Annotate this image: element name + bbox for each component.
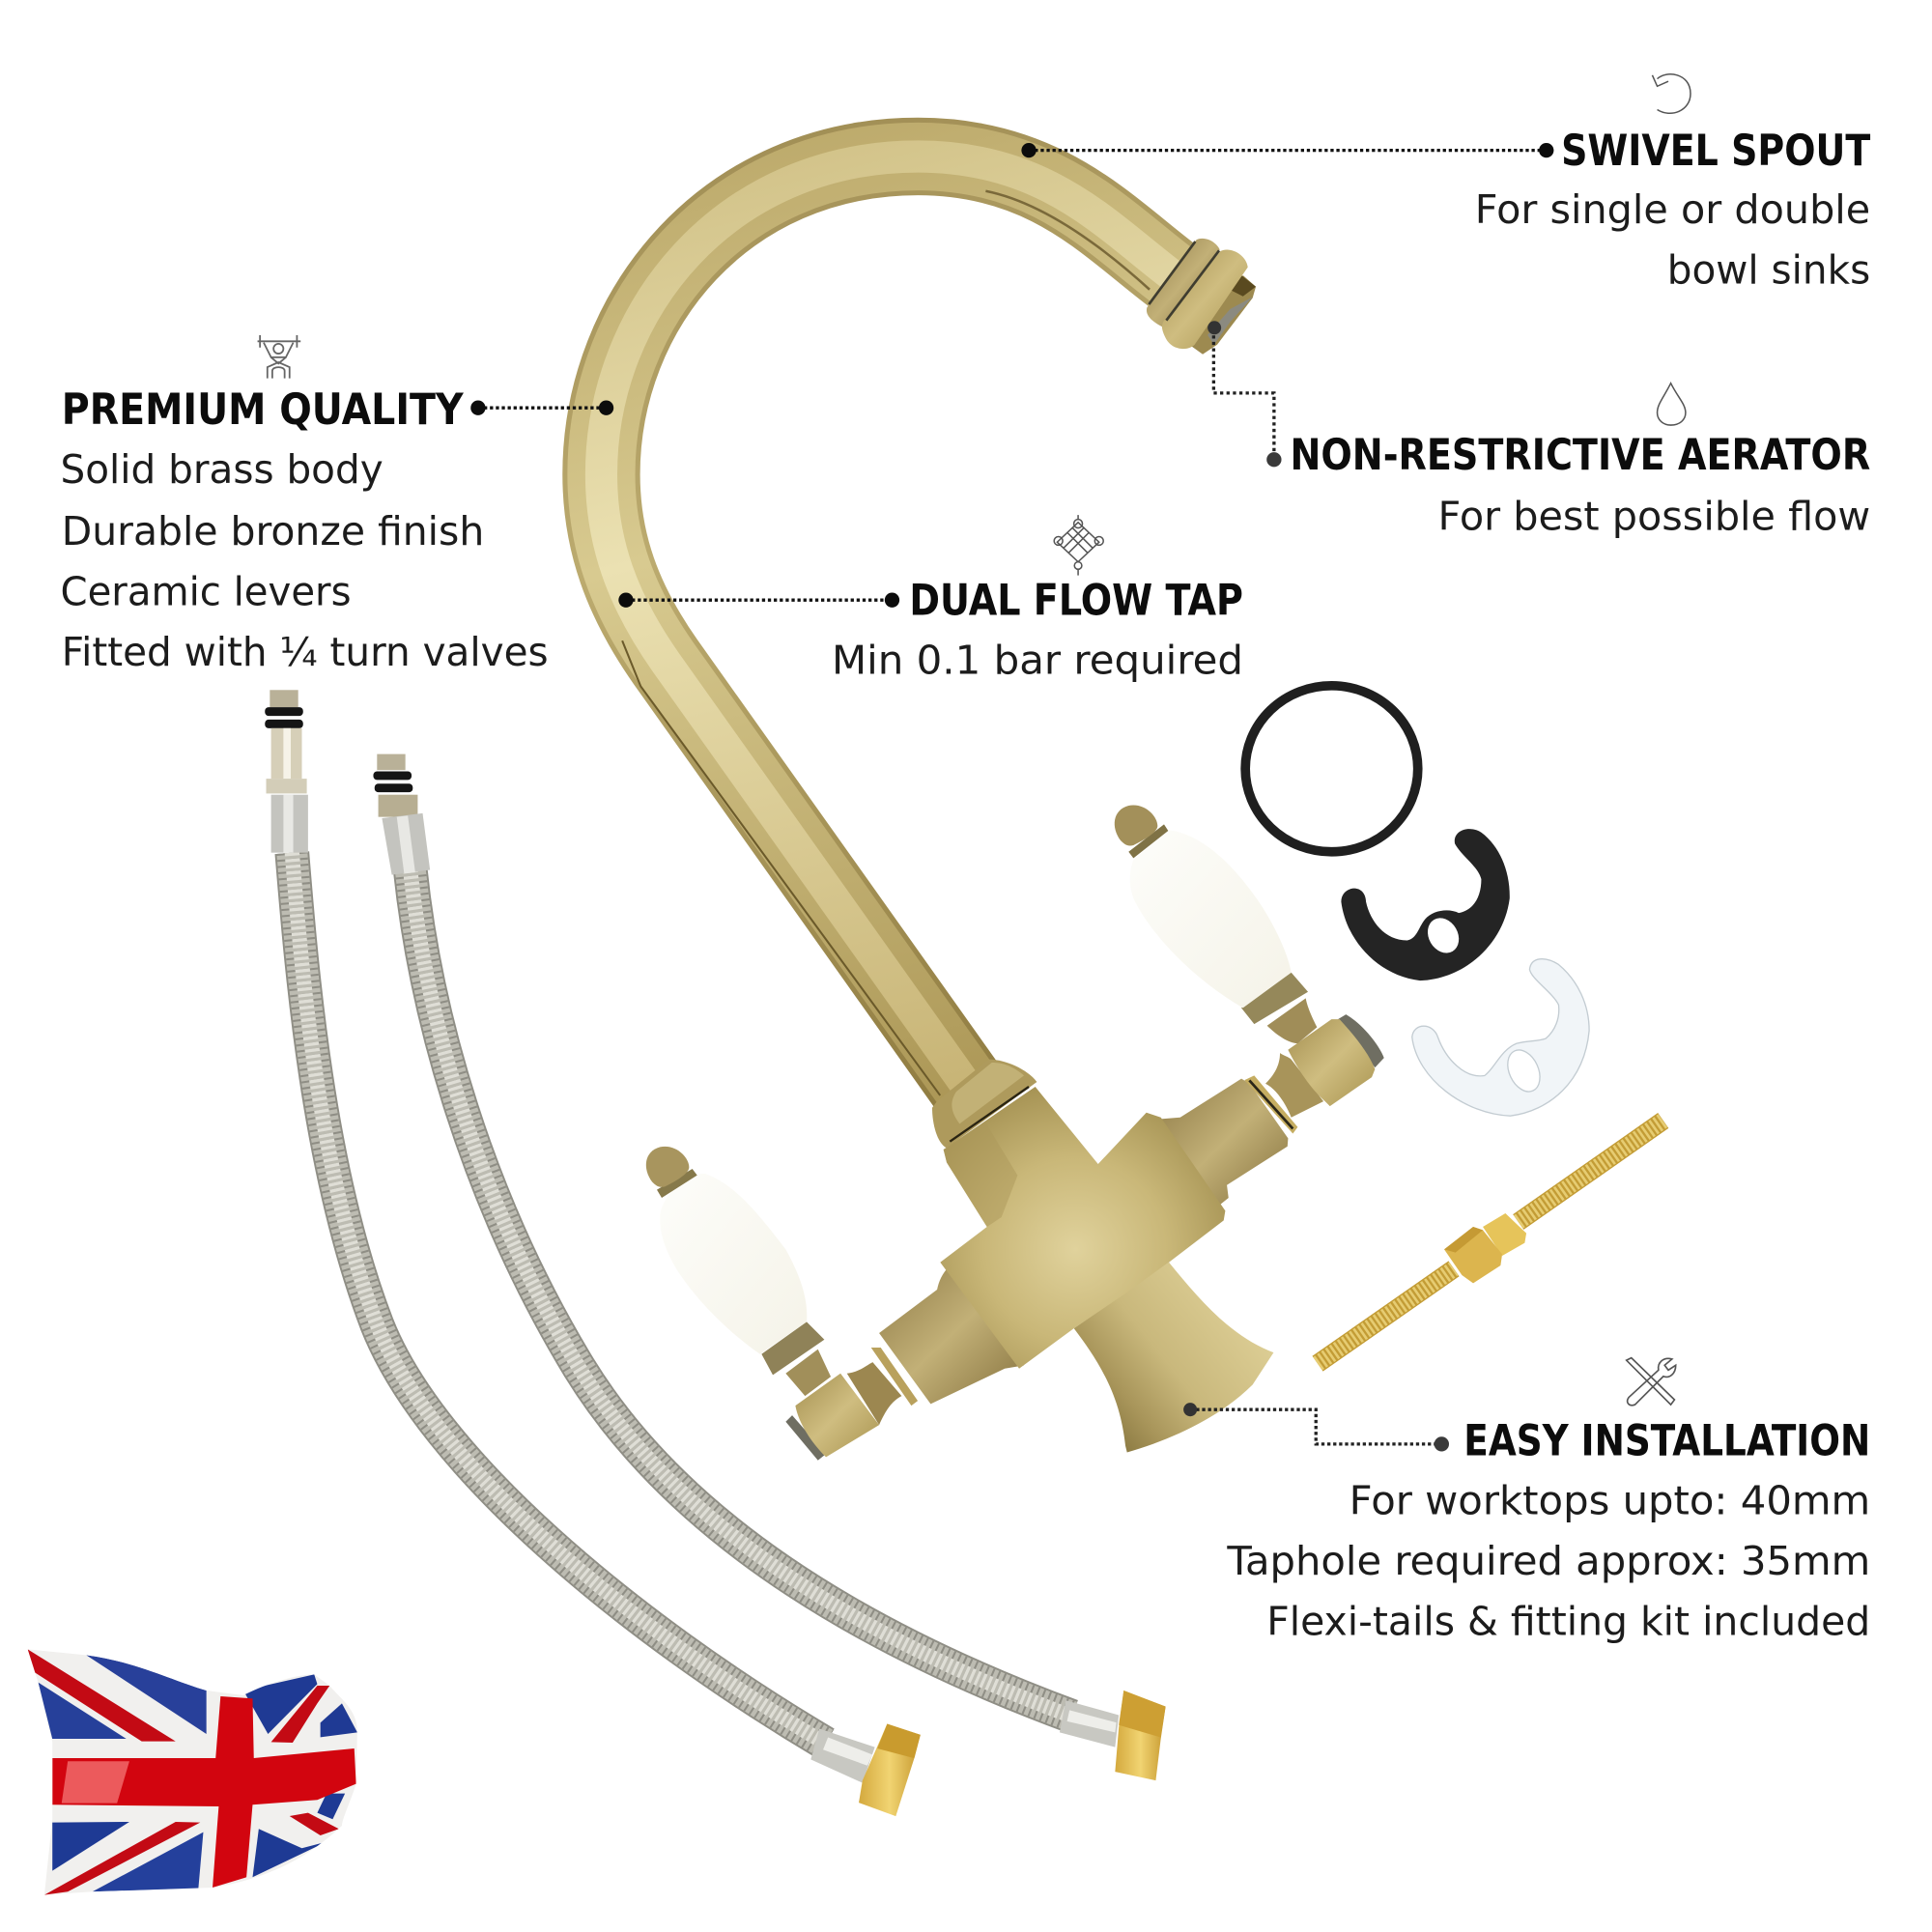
right ceramic lever	[1115, 806, 1317, 1043]
text: premium quality: Solid brass body	[60, 446, 384, 493]
leader: dual flow tap	[618, 593, 899, 608]
icon: tools	[1627, 1358, 1676, 1406]
tap body	[785, 1014, 1384, 1461]
black rubber washer	[1341, 829, 1510, 980]
text: dual flow tap	[832, 575, 1243, 684]
text: premium quality: PREMIUM QUALITY	[62, 384, 464, 435]
cross body	[940, 1087, 1225, 1369]
spout tube	[601, 156, 1173, 1095]
spout nozzle and aerator	[1147, 239, 1256, 355]
text: premium quality	[60, 384, 549, 675]
hose: left flexi-tail	[265, 690, 921, 1816]
right valve assembly	[1161, 1014, 1384, 1205]
text: swivel spout: For single or double	[1475, 186, 1870, 233]
text: easy installation: Flexi-tails & fitting kit included	[1266, 1599, 1870, 1645]
text: premium quality: Fitted with ¼ turn valves	[62, 629, 549, 675]
spout collar	[932, 1060, 1037, 1148]
text: dual flow tap: DUAL FLOW TAP	[909, 575, 1243, 625]
silver backing plate	[1412, 959, 1589, 1116]
text: swivel spout	[1475, 126, 1871, 293]
UK flag	[27, 1650, 357, 1895]
rubber o-ring	[1245, 686, 1418, 852]
icon: water drop	[1658, 384, 1686, 425]
text: non-restrictive aerator	[1290, 430, 1870, 539]
leader: aerator	[1208, 321, 1282, 467]
left valve assembly	[785, 1265, 1024, 1461]
text: easy installation: For worktops upto: 40mm	[1350, 1478, 1870, 1524]
text: swivel spout: bowl sinks	[1667, 246, 1870, 293]
text: non-restrictive aerator: For best possible flow	[1438, 493, 1870, 539]
icon: swivel arrow	[1652, 74, 1690, 113]
icon: endless knot	[1054, 515, 1103, 576]
text: premium quality: Durable bronze finish	[62, 508, 484, 554]
leader: swivel spout	[1021, 143, 1553, 157]
text: swivel spout: SWIVEL SPOUT	[1561, 126, 1871, 176]
hose: right flexi-tail	[373, 754, 1166, 1780]
text: premium quality: Ceramic levers	[60, 568, 352, 614]
text: easy installation: Taphole required approx: 35mm	[1226, 1538, 1870, 1584]
icon: weightlifter	[258, 335, 300, 379]
leader: premium quality	[470, 401, 613, 415]
flared base	[1074, 1263, 1273, 1452]
left ceramic lever	[646, 1147, 831, 1396]
text: easy installation	[1226, 1415, 1870, 1645]
text: dual flow tap: Min 0.1 bar required	[832, 638, 1243, 684]
threaded mounting rod	[1318, 1121, 1663, 1364]
leader: easy installation	[1183, 1403, 1449, 1452]
flared base and cross body	[932, 1060, 1273, 1452]
